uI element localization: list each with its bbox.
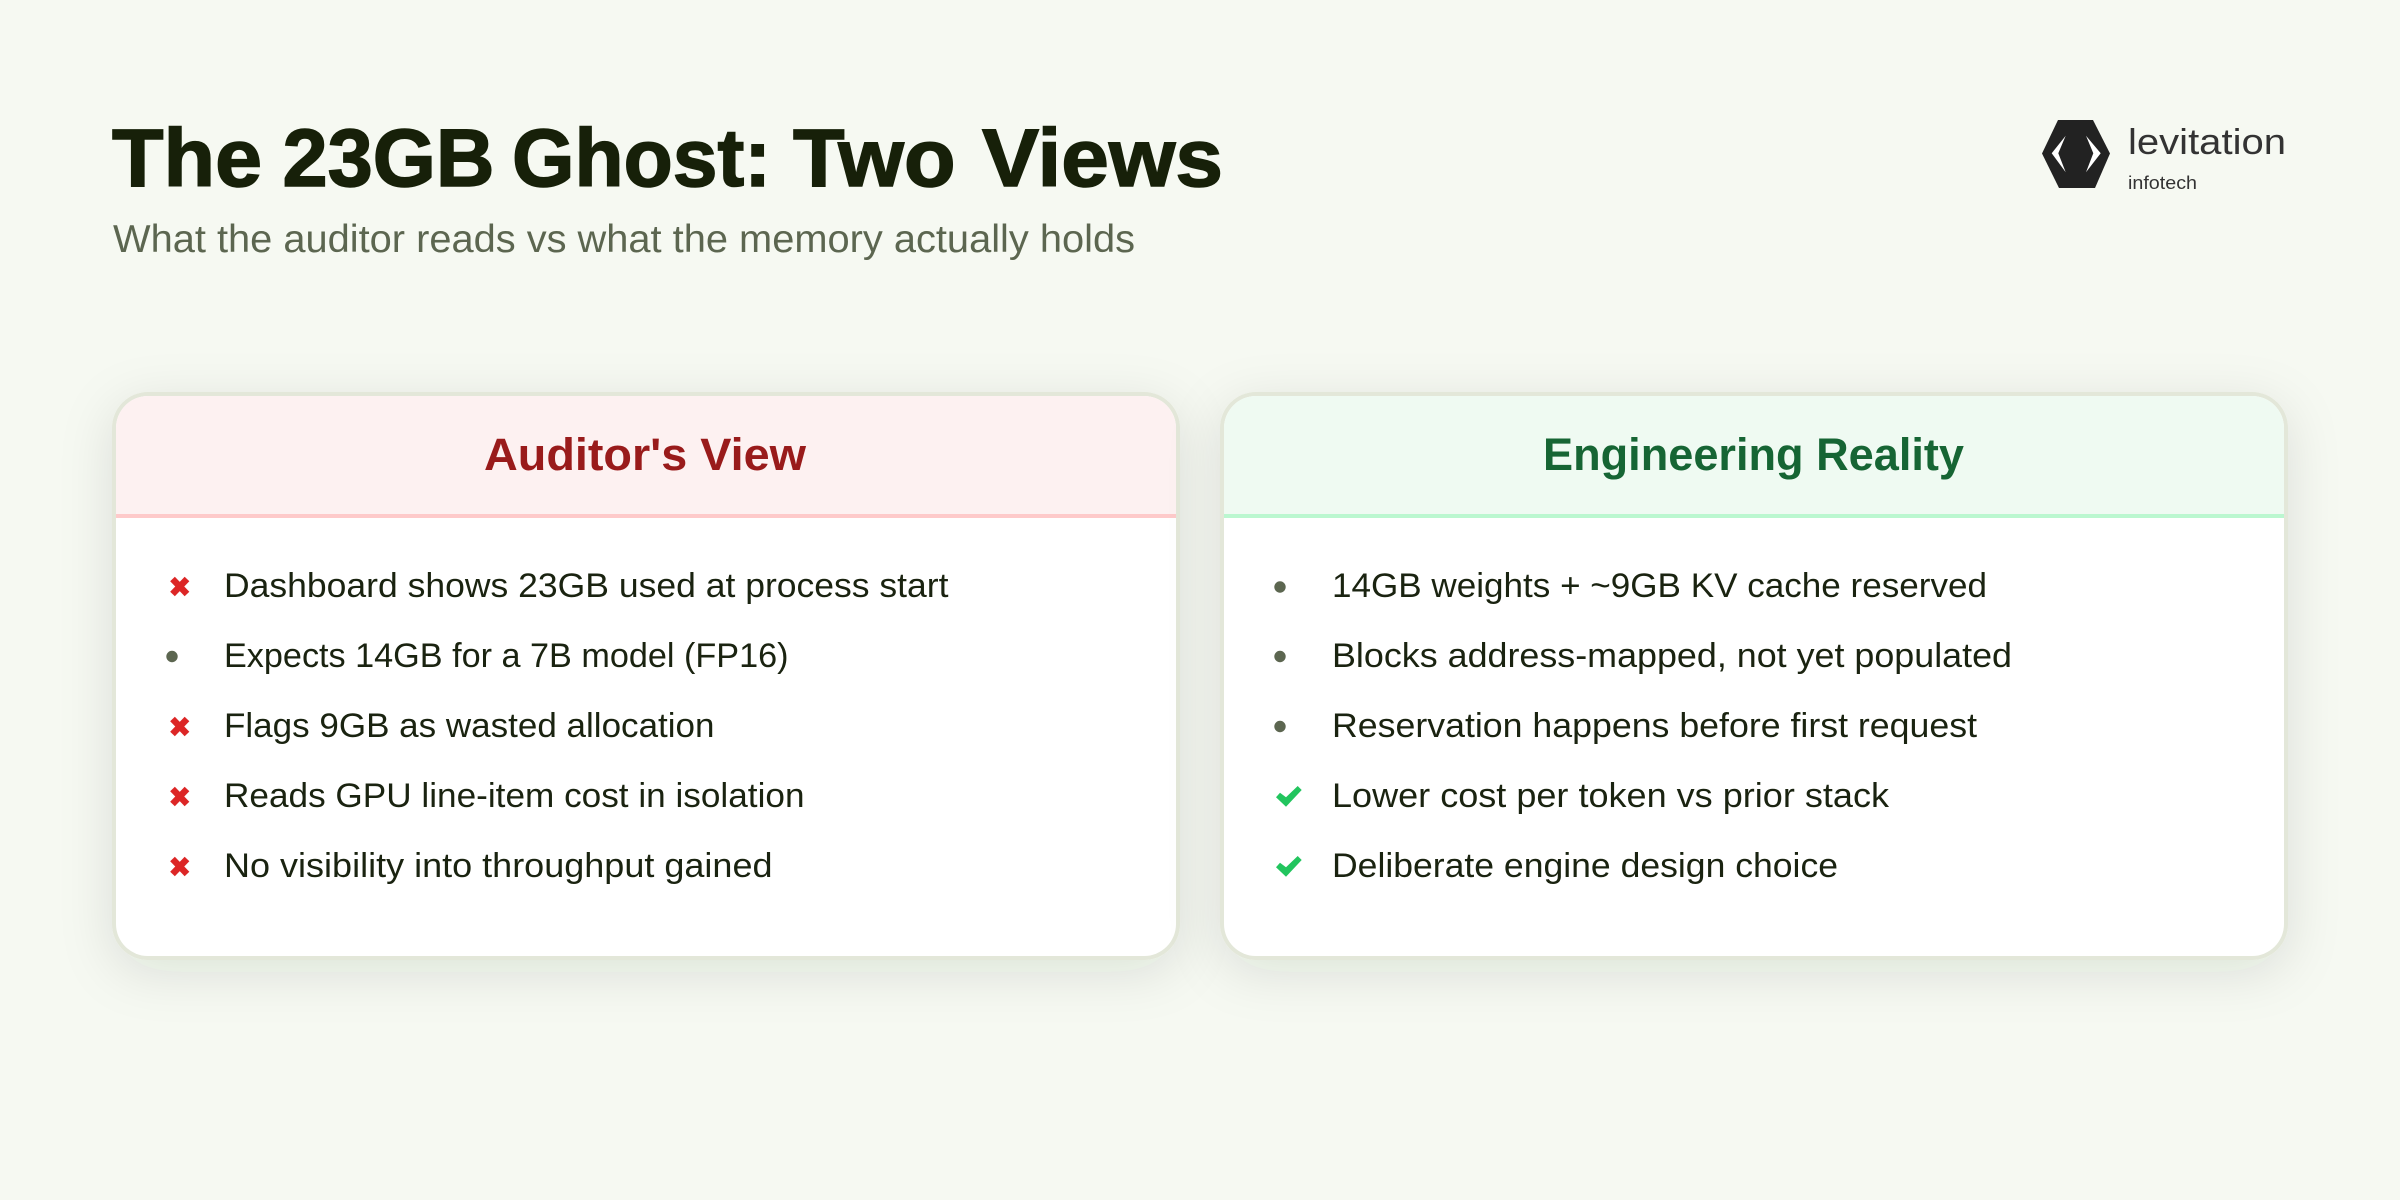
- card header: auditor's view: Auditor's View: [484, 429, 807, 480]
- card header: engineering reality: Engineering Reality: [1543, 429, 1964, 480]
- title: The: [112, 113, 262, 204]
- title: 23GB: [282, 113, 494, 204]
- panel: auditor's view: [112, 392, 1180, 960]
- icon: hexagon with chevrons: [2042, 120, 2110, 188]
- item: flags 9GB: Flags 9GB as wasted allocation: [224, 707, 714, 745]
- card header: auditor's view: [116, 396, 1176, 518]
- item: expects 14GB: Expects 14GB for a 7B model (FP16): [224, 637, 788, 675]
- item: weights and KV cache: 14GB weights + ~9GB KV cache reserved: [1332, 567, 1987, 605]
- item: deliberate design: Deliberate engine design choice: [1332, 847, 1838, 885]
- card header: engineering reality: [1224, 396, 2284, 518]
- item: no visibility: No visibility into throughput gained: [224, 847, 772, 885]
- logo tagline: infotech: [2128, 173, 2197, 193]
- item: reads GPU cost: Reads GPU line-item cost in isolation: [224, 777, 804, 815]
- list: auditor points: [166, 567, 949, 885]
- list: engineering points: [1274, 567, 2012, 885]
- title: Ghost:: [512, 113, 771, 204]
- card frame: [112, 392, 1180, 960]
- item: dashboard shows 23GB: Dashboard shows 23GB used at process start: [224, 567, 949, 605]
- item: lower cost per token: Lower cost per token vs prior stack: [1332, 777, 1890, 815]
- title: Two: [793, 113, 956, 204]
- title: [112, 113, 1223, 204]
- item: blocks address-mapped: Blocks address-mapped, not yet populated: [1332, 637, 2012, 675]
- logo: levitation infotech: [2042, 120, 2286, 193]
- subtitle: What the auditor reads vs what the memory actually holds: [113, 218, 1135, 261]
- logo wordmark: levitation: [2128, 121, 2286, 162]
- card frame: [1220, 392, 2288, 960]
- item: reservation timing: Reservation happens before first request: [1332, 707, 1978, 745]
- title: Views: [982, 113, 1223, 204]
- panel: engineering reality: [1220, 392, 2288, 960]
